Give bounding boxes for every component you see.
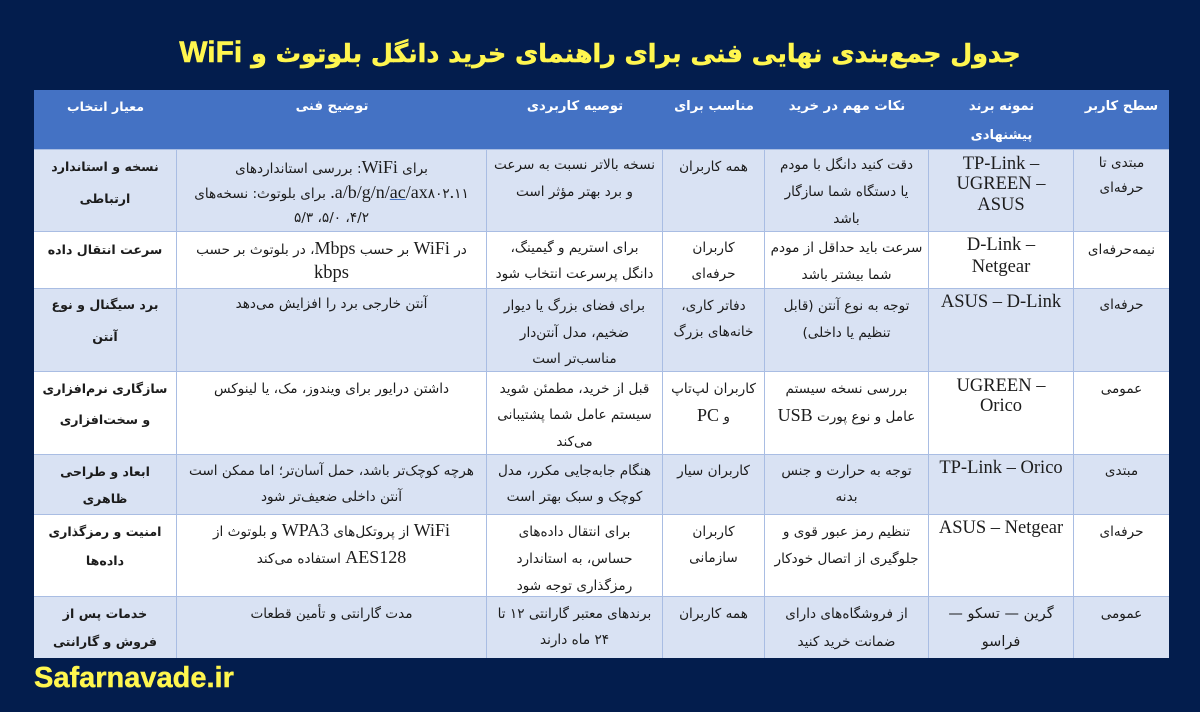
technical description	[177, 515, 487, 596]
technical description: داشتن درایور برای ویندوز، مک، یا لینوکس	[214, 381, 449, 397]
brands: D-Link –	[967, 235, 1035, 255]
user level: نیمه‌حرفه‌ای	[1088, 242, 1155, 258]
technical description: WiFi از پروتکل‌های WPA3 و بلوتوث از	[213, 520, 450, 540]
technical description: ۴/۲، ۵/۰، ۵/۳	[294, 210, 369, 226]
brands	[929, 372, 1074, 454]
criterion: ارتباطی	[80, 191, 130, 206]
practical advice: مناسب‌تر است	[532, 351, 617, 367]
header: suitable for: مناسب برای	[674, 99, 754, 114]
buying tips: عامل و نوع پورت USB	[778, 405, 915, 425]
practical advice	[487, 150, 663, 231]
buying tips: یا دستگاه شما سازگار	[785, 184, 908, 200]
suitable for: همه کاربران	[679, 159, 748, 175]
practical advice: کوچک و سبک بهتر است	[507, 489, 642, 505]
suitable for: کاربران	[692, 524, 735, 540]
suitable for	[663, 289, 765, 371]
buying tips: تنظیم یا داخلی)	[802, 325, 891, 341]
header: practical advice: توصیه کاربردی	[527, 99, 623, 114]
row: version and standard	[34, 150, 1169, 232]
practical advice: ضخیم، مدل آنتن‌دار	[520, 325, 629, 341]
brands	[929, 289, 1074, 371]
suitable for	[663, 150, 765, 231]
criterion	[34, 372, 177, 454]
practical advice	[487, 597, 663, 658]
suitable for: خانه‌های بزرگ	[674, 324, 753, 340]
header: buying tips: نکات مهم در خرید	[789, 99, 905, 114]
technical description: هرچه کوچک‌تر باشد، حمل آسان‌تر؛ اما ممکن است	[189, 463, 474, 479]
buying tips	[765, 515, 929, 596]
practical advice: دانگل پرسرعت انتخاب شود	[496, 266, 653, 282]
technical description	[177, 455, 487, 514]
criterion	[34, 597, 177, 658]
criterion: آنتن	[92, 329, 118, 344]
practical advice: برای استریم و گیمینگ،	[510, 240, 639, 256]
criterion	[34, 515, 177, 596]
table header row	[34, 90, 1169, 150]
technical description: a/b/g/n/ac/ax۸۰۲.۱۱. برای بلوتوث: نسخه‌های	[194, 182, 469, 202]
buying tips	[765, 232, 929, 288]
criterion: ظاهری	[83, 491, 127, 506]
row: software and hardware compatibility	[34, 372, 1169, 455]
criterion: ابعاد و طراحی	[60, 464, 150, 479]
brands: فراسو	[982, 634, 1020, 650]
user level: عمومی	[1101, 606, 1142, 622]
buying tips: ضمانت خرید کنید	[798, 634, 895, 650]
buying tips: از فروشگاه‌های دارای	[785, 606, 908, 622]
buying tips: شما بیشتر باشد	[801, 267, 892, 283]
suitable for	[663, 455, 765, 514]
brands	[929, 150, 1074, 231]
buying tips	[765, 289, 929, 371]
criterion	[34, 455, 177, 514]
suitable for: سازمانی	[689, 550, 738, 566]
practical advice: و برد بهتر مؤثر است	[516, 184, 633, 200]
technical description: آنتن داخلی ضعیف‌تر شود	[261, 489, 402, 505]
header: suggested brands	[969, 99, 1034, 143]
suitable for: و PC	[697, 405, 730, 425]
buying tips	[765, 455, 929, 514]
buying tips: دقت کنید دانگل با مودم	[780, 157, 913, 173]
brands: UGREEN –	[957, 376, 1045, 396]
technical description: برای WiFi: بررسی استانداردهای	[235, 157, 428, 177]
brands	[929, 597, 1074, 658]
suitable for: حرفه‌ای	[691, 266, 736, 282]
row: data transfer speed	[34, 232, 1169, 289]
buying tips: توجه به نوع آنتن (قابل	[784, 298, 909, 314]
buying tips: تنظیم رمز عبور قوی و	[783, 524, 910, 540]
practical advice: حساس، به استاندارد	[516, 551, 633, 567]
suitable for: کاربران سیار	[677, 463, 750, 479]
technical description	[177, 372, 487, 454]
practical advice: برای فضای بزرگ یا دیوار	[504, 298, 645, 314]
brands: UGREEN –	[957, 174, 1045, 194]
suitable for	[663, 515, 765, 596]
brands: گرین — تسکو —	[948, 606, 1054, 622]
brands: Orico	[980, 396, 1022, 416]
practical advice	[487, 289, 663, 371]
technical description: AES128 استفاده می‌کند	[257, 547, 406, 567]
suitable for	[663, 232, 765, 288]
buying tips: بدنه	[836, 489, 858, 505]
brands: TP-Link – Orico	[939, 458, 1063, 478]
user level: حرفه‌ای	[1099, 297, 1144, 313]
row: dimensions and physical design	[34, 455, 1169, 515]
user level: عمومی	[1101, 381, 1142, 397]
technical description	[177, 289, 487, 371]
buying tips: سرعت باید حداقل از مودم	[771, 240, 922, 256]
criterion: خدمات پس از	[63, 606, 147, 621]
comparison table	[34, 90, 1169, 658]
brands: ASUS – D-Link	[941, 292, 1061, 312]
criterion	[34, 289, 177, 371]
suitable for	[663, 372, 765, 454]
practical advice: رمزگذاری توجه شود	[517, 578, 632, 594]
suitable for: همه کاربران	[679, 606, 748, 622]
header: user level: سطح کاربر	[1085, 99, 1158, 114]
technical description: مدت گارانتی و تأمین قطعات	[250, 606, 413, 622]
header: suggested brands: نمونه برند	[969, 99, 1034, 114]
criterion: داده‌ها	[86, 553, 124, 568]
user level: حرفه‌ای	[1099, 524, 1144, 540]
criterion: امنیت و رمزگذاری	[49, 524, 161, 539]
technical description: در WiFi بر حسب Mbps، در بلوتوث بر حسب	[196, 238, 467, 258]
buying tips: باشد	[833, 211, 860, 227]
practical advice: برندهای معتبر گارانتی ۱۲ تا	[498, 606, 651, 622]
buying tips: جلوگیری از اتصال خودکار	[774, 551, 918, 567]
suitable for	[663, 597, 765, 658]
criterion: سرعت انتقال داده	[48, 242, 162, 257]
practical advice: ۲۴ ماه دارند	[540, 632, 609, 648]
user level	[1099, 155, 1144, 196]
row: after-sales service and warranty	[34, 597, 1169, 658]
header: selection criterion: معیار انتخاب	[67, 99, 144, 114]
header: technical description: توضیح فنی	[296, 99, 368, 114]
header: suggested brands: پیشنهادی	[971, 128, 1032, 143]
practical advice: می‌کند	[556, 434, 593, 450]
brands	[929, 515, 1074, 596]
brands: ASUS	[977, 195, 1025, 215]
practical advice	[487, 455, 663, 514]
criterion: و سخت‌افزاری	[60, 412, 150, 427]
brands: Netgear	[972, 257, 1030, 277]
criterion	[34, 232, 177, 288]
buying tips: بررسی نسخه سیستم	[786, 381, 907, 397]
practical advice: قبل از خرید، مطمئن شوید	[500, 381, 649, 397]
brands	[929, 455, 1074, 514]
technical description: آنتن خارجی برد را افزایش می‌دهد	[236, 296, 427, 312]
buying tips: توجه به حرارت و جنس	[781, 463, 912, 479]
row: signal range and antenna type	[34, 289, 1169, 372]
technical description	[177, 597, 487, 658]
criterion: نسخه و استاندارد	[51, 159, 159, 174]
user level: مبتدی تا	[1099, 155, 1144, 171]
brands: TP-Link –	[963, 154, 1039, 174]
technical description: kbps	[314, 263, 349, 283]
suitable for: دفاتر کاری،	[681, 298, 746, 314]
practical advice	[487, 515, 663, 596]
suitable for: کاربران لپ‌تاپ	[671, 381, 756, 397]
buying tips	[765, 597, 929, 658]
user level: مبتدی	[1105, 463, 1138, 479]
criterion: برد سیگنال و نوع	[52, 297, 158, 312]
buying tips	[765, 150, 929, 231]
practical advice: برای انتقال داده‌های	[519, 524, 630, 540]
buying tips	[765, 372, 929, 454]
criterion: فروش و گارانتی	[53, 634, 157, 649]
criterion: سازگاری نرم‌افزاری	[43, 381, 167, 396]
brands	[929, 232, 1074, 288]
criterion	[34, 150, 177, 231]
practical advice	[487, 372, 663, 454]
practical advice: هنگام جابه‌جایی مکرر، مدل	[498, 463, 651, 479]
user level: حرفه‌ای	[1099, 180, 1144, 196]
row: security and data encryption	[34, 515, 1169, 597]
logo text: Safarnavade.ir: Safarnavade.ir	[34, 662, 234, 694]
technical description	[177, 150, 487, 231]
technical description	[177, 232, 487, 288]
practical advice: نسخه بالاتر نسبت به سرعت	[494, 157, 655, 173]
brands: ASUS – Netgear	[939, 518, 1063, 538]
practical advice	[487, 232, 663, 288]
practical advice: سیستم عامل شما پشتیبانی	[497, 407, 652, 423]
suitable for: کاربران	[692, 240, 735, 256]
title: جدول جمع‌بندی نهایی فنی برای راهنمای خرید دانگل بلوتوث و WiFi	[179, 36, 1021, 69]
